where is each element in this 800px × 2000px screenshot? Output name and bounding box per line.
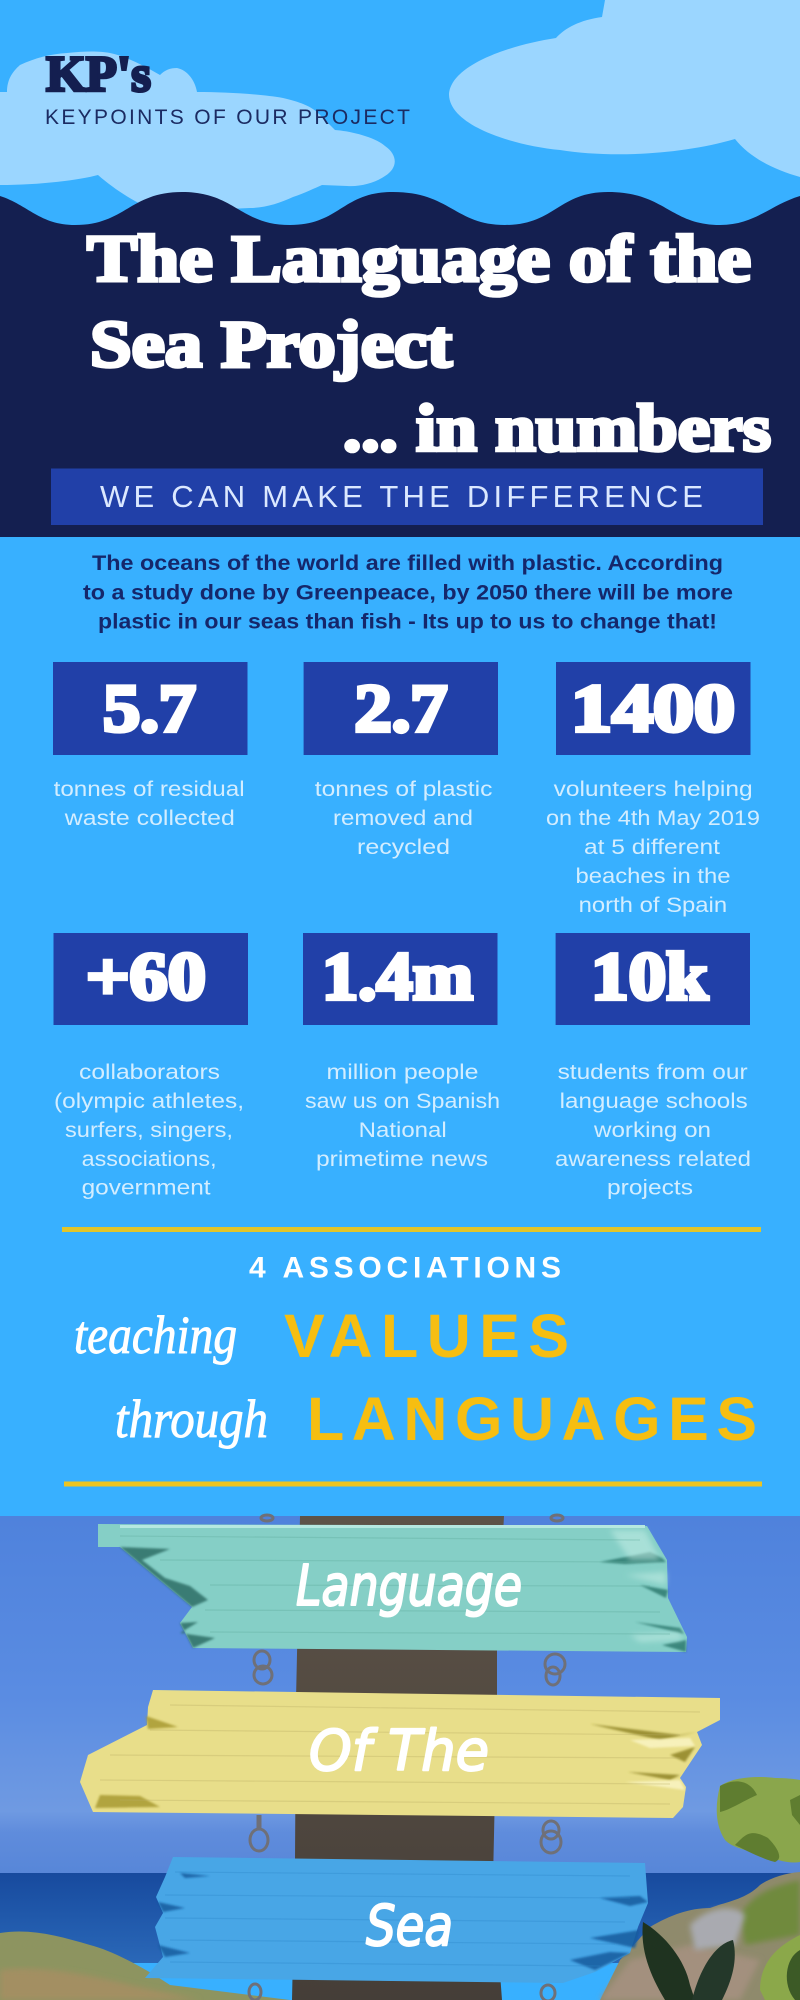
photo sea: [0, 1873, 800, 1963]
subtitle: keypoints: KEYPOINTS OF OUR PROJECT: [45, 106, 410, 129]
sign chains: [249, 1515, 565, 2000]
tagline: through languages: LANGUAGES: [307, 1385, 757, 1453]
cloud right: [449, 0, 800, 177]
stat: 1400: at 5 different: [584, 836, 720, 859]
sign: Of The: Of The: [309, 1719, 489, 1784]
cloud left: [0, 52, 395, 212]
tagline: teaching values: [74, 1302, 569, 1370]
navy header with wave: [0, 192, 800, 537]
stat: 1.4m: [303, 933, 500, 1171]
title: [87, 222, 771, 466]
intro paragraph: plastic in our seas than fish - Its up to us to change that!: [98, 610, 717, 634]
stat: +60: surfers, singers,: [65, 1119, 233, 1142]
stat: 10k: [555, 933, 751, 1200]
stat: 1.4m: million people: [326, 1061, 478, 1084]
stat: 1400: volunteers helping: [554, 778, 753, 801]
tagline: teaching values: VALUES: [284, 1302, 569, 1370]
stat: 1400: on the 4th May 2019: [546, 807, 760, 830]
stat: 2.7: [304, 662, 498, 859]
stat: 10k: projects: [607, 1176, 693, 1200]
stat: 5.7: 5.7: [103, 670, 196, 746]
title: Sea Project: [90, 308, 453, 382]
intro paragraph: to a study done by Greenpeace, by 2050 there will be more: [83, 582, 733, 604]
stat: +60: associations,: [82, 1148, 217, 1171]
leaves right: [642, 1777, 800, 2000]
stat: +60: (olympic athletes,: [54, 1090, 244, 1113]
stat: +60: +60: [86, 938, 206, 1014]
sign: Language: [98, 1524, 687, 1652]
stat: 5.7: [53, 662, 248, 830]
stat: +60: [54, 933, 248, 1200]
sign: Sea: Sea: [366, 1894, 453, 1959]
sign: Of The: [80, 1690, 720, 1818]
stat: 1.4m: primetime news: [316, 1148, 488, 1171]
stat: 1.4m: 1.4m: [322, 938, 473, 1014]
banner: we can make the difference: WE CAN MAKE THE DIFFERENCE: [100, 479, 703, 514]
intro paragraph: The oceans of the world are filled with plastic. According: [92, 552, 723, 575]
title: ... in numbers: [343, 392, 771, 466]
sign: Sea: [145, 1857, 648, 1983]
stat: 1.4m: saw us on Spanish: [305, 1090, 500, 1113]
banner: we can make the difference: [51, 468, 763, 525]
stat: 5.7: waste collected: [64, 807, 235, 830]
stat: 10k: working on: [593, 1119, 711, 1142]
stat: 10k: students from our: [558, 1061, 748, 1084]
title: The Language of the: [87, 222, 751, 296]
stat: 1400: beaches in the: [576, 865, 730, 888]
stat: 10k: 10k: [591, 938, 708, 1014]
photo sky: [0, 1516, 800, 1876]
stat: 10k: language schools: [560, 1090, 748, 1113]
stat: +60: government: [82, 1176, 211, 1200]
stat: 1400: 1400: [571, 670, 735, 746]
stat: 10k: awareness related: [555, 1148, 751, 1171]
stat: 1400: north of Spain: [579, 894, 727, 917]
stat: 2.7: removed and: [333, 807, 473, 830]
stat: 5.7: tonnes of residual: [54, 778, 245, 801]
stat: 2.7: tonnes of plastic: [315, 778, 492, 801]
stat: +60: collaborators: [79, 1061, 220, 1084]
stat: 1.4m: National: [359, 1119, 447, 1142]
logo: KP's: KP's: [46, 47, 151, 103]
photo post: [292, 1516, 504, 2000]
associations heading: 4 ASSOCIATIONS: [249, 1252, 561, 1284]
stat: 2.7: recycled: [357, 836, 450, 859]
stat: 2.7: 2.7: [354, 670, 448, 746]
tagline: through languages: through: [115, 1389, 268, 1449]
tagline: teaching values: teaching: [74, 1305, 237, 1365]
sign: Language: Language: [296, 1554, 522, 1619]
photo grass: [0, 1872, 800, 2000]
intro paragraph: [83, 552, 733, 634]
photo: signpost on the beach: [0, 1515, 800, 2000]
stat: 1400: [546, 662, 760, 917]
